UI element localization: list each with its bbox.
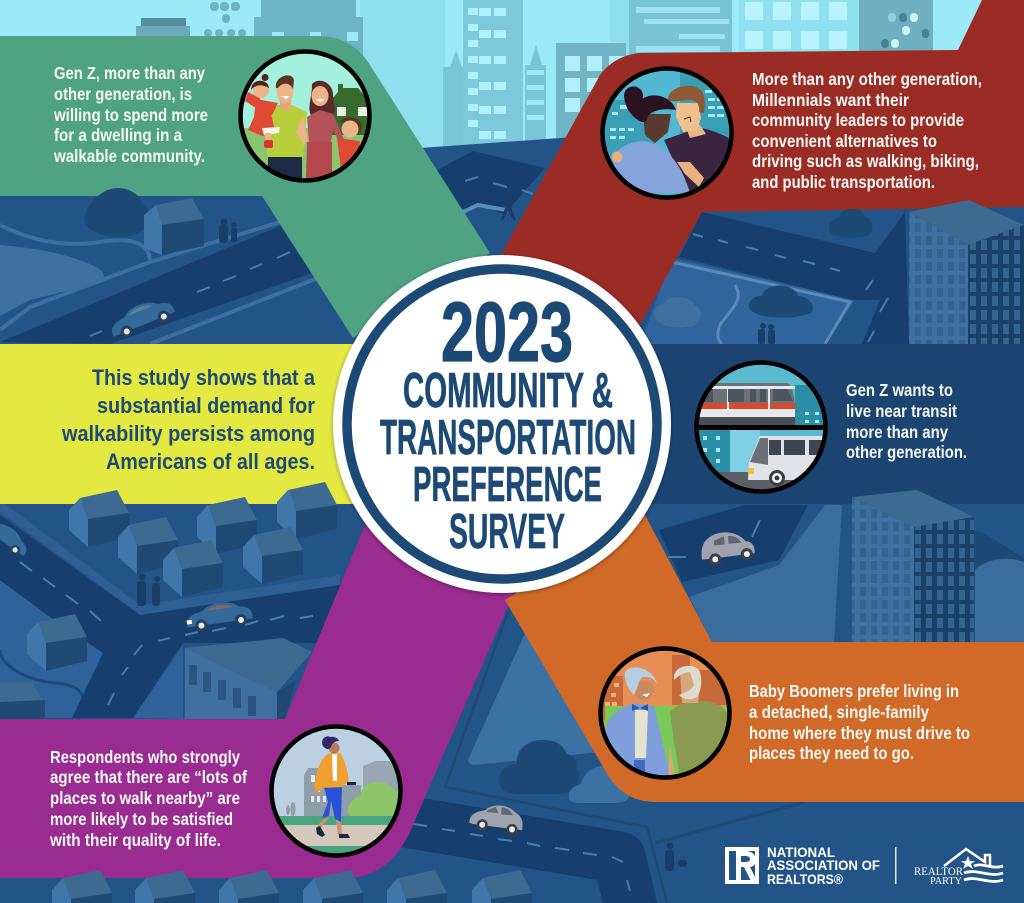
text: green panel: Gen Z, more than any	[54, 63, 205, 83]
tree: upper right	[829, 209, 872, 238]
text: red panel: More than any other generation,	[752, 69, 982, 89]
title: words	[380, 364, 636, 559]
building: lower right	[852, 490, 974, 642]
text: red panel: Millennials want their	[752, 90, 909, 110]
logo: Realtor Party: REALTOR	[914, 864, 963, 878]
text: green panel	[53, 63, 208, 166]
car: silver bottom	[469, 803, 524, 836]
houses: central neighbourhood	[0, 482, 337, 719]
text: green panel: for a dwelling in a	[54, 125, 182, 145]
title: words: SURVEY	[449, 505, 565, 559]
text: orange panel: Baby Boomers prefer living in	[749, 681, 959, 701]
title: words: PREFERENCE	[413, 458, 602, 512]
band: green	[0, 36, 490, 338]
street scene: lower right	[659, 505, 1024, 642]
houses: bottom row	[52, 870, 532, 903]
text: red panel: convenient alternatives to	[752, 131, 937, 151]
street scene: upper left	[0, 222, 318, 344]
text: navy panel: more than any	[846, 422, 948, 442]
text: red panel: community leaders to provide	[752, 110, 964, 130]
text: yellow panel: This study shows that a	[92, 365, 316, 390]
text: red panel: and public transportation.	[752, 172, 935, 192]
logo: National Association of Realtors: ASSOCIATION OF	[767, 857, 880, 873]
building: lower left	[185, 638, 312, 719]
building: upper right	[909, 200, 1024, 344]
text: orange panel: places they need to go.	[749, 743, 914, 763]
street scene: upper right	[640, 212, 909, 344]
title: words: TRANSPORTATION	[380, 411, 636, 465]
text: orange panel: a detached, single-family	[749, 702, 929, 722]
car: blue left edge	[0, 513, 33, 560]
logo: National Association of Realtors: REALTORS®	[767, 871, 844, 887]
logo: Realtor Party: PARTY	[930, 875, 962, 887]
skyline	[136, 0, 933, 150]
text: orange panel	[749, 681, 970, 763]
logo: Realtor Party	[914, 849, 1003, 887]
band: red	[498, 0, 1024, 325]
icon: family	[240, 52, 370, 183]
logo: National Association of Realtors: NATIONAL	[767, 844, 835, 860]
tree and house: upper left	[84, 188, 237, 255]
icon: walker	[270, 726, 402, 858]
background: sky	[0, 0, 1024, 150]
logo divider	[895, 847, 896, 884]
text: purple panel: agree that there are “lots of	[50, 767, 247, 787]
car: silver right	[699, 529, 756, 567]
text: purple panel: Respondents who strongly	[50, 747, 240, 767]
text: yellow panel: substantial demand for	[97, 393, 315, 418]
text: yellow panel: walkability persists among	[61, 421, 315, 446]
text: navy panel: Gen Z wants to	[846, 380, 953, 400]
car: blue upper left	[106, 293, 177, 342]
icon: transit	[695, 362, 830, 496]
band: navy	[640, 344, 1024, 504]
text: green panel: other generation, is	[54, 84, 192, 104]
title: words: COMMUNITY &	[403, 364, 613, 418]
central title badge	[333, 255, 671, 593]
text: red panel: driving such as walking, biking,	[752, 151, 979, 171]
text: orange panel: home where they must drive to	[749, 723, 970, 743]
text: yellow panel	[61, 365, 316, 474]
pedestrians	[137, 574, 160, 606]
car: blue lower left	[185, 599, 254, 633]
text: purple panel	[49, 747, 247, 850]
text: yellow panel: Americans of all ages.	[106, 449, 315, 474]
text: navy panel	[846, 380, 967, 462]
text: green panel: walkable community.	[53, 146, 205, 166]
title: year: 2023	[441, 285, 573, 379]
street scene: lower left	[0, 500, 340, 719]
text: red panel	[752, 69, 982, 192]
text: purple panel: with their quality of life.	[49, 830, 221, 850]
band: yellow	[0, 344, 360, 504]
text: green panel: willing to spend more	[53, 105, 208, 125]
icon: couple	[602, 68, 732, 198]
logo: National Association of Realtors	[727, 844, 880, 887]
street scene: upper centre road	[433, 151, 545, 220]
text: purple panel: places to walk nearby” are	[50, 788, 240, 808]
icon: seniors	[600, 648, 730, 778]
text: navy panel: live near transit	[846, 401, 957, 421]
band: purple	[0, 525, 515, 878]
text: purple panel: more likely to be satisfied	[50, 809, 233, 829]
band: orange	[505, 515, 1024, 802]
street scene: lower centre	[400, 612, 805, 903]
text: navy panel: other generation.	[846, 442, 967, 462]
